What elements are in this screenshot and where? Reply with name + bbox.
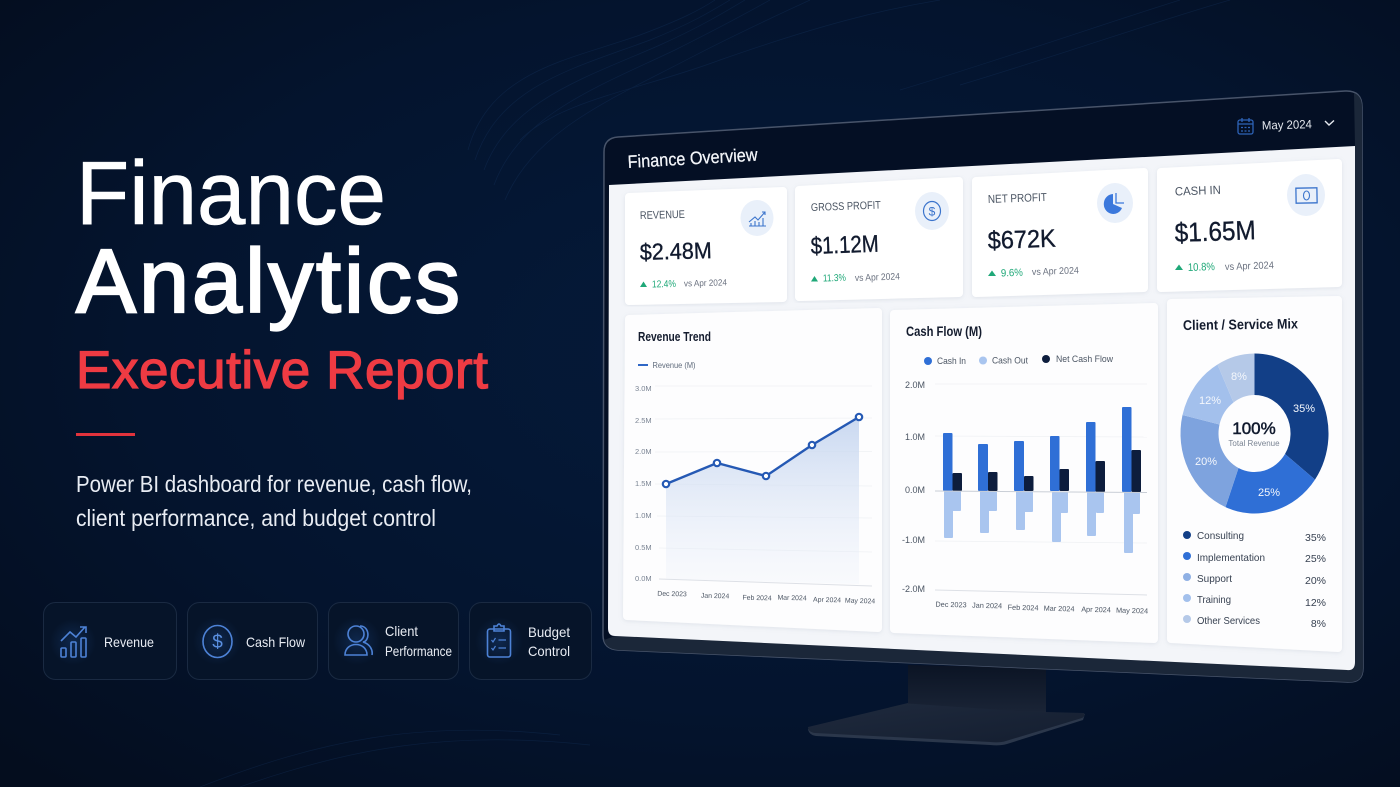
panel: client service mix xyxy=(1171,300,1338,648)
legend: revenue: Revenue (M) xyxy=(652,361,696,370)
bar chart: cash flow: -2.0M xyxy=(902,584,925,594)
donut chart: 20% xyxy=(1195,456,1217,468)
kpi card: cash in: 10.8% xyxy=(1188,261,1215,274)
line chart: revenue: Feb 2024 xyxy=(742,595,772,602)
legend: service mix: 8% xyxy=(1311,618,1326,630)
kpi card: revenue xyxy=(629,191,783,301)
bar chart: cash flow: 2.0M xyxy=(905,380,925,390)
line chart: revenue: 2.0M xyxy=(635,447,652,456)
kpi card: gross profit: 11.3% xyxy=(823,273,846,284)
kpi card: net profit: 9.6% xyxy=(1001,267,1023,279)
line chart: revenue: Dec 2023 xyxy=(657,591,687,598)
kpi card: revenue: 12.4% xyxy=(652,279,676,290)
kpi card: gross profit: GROSS PROFIT xyxy=(811,200,881,214)
pill: client performance: Performance xyxy=(385,643,452,659)
panel: revenue trend xyxy=(627,312,878,628)
title xyxy=(76,144,488,400)
bar chart: cash flow: 1.0M xyxy=(905,432,925,442)
legend: service mix: 35% xyxy=(1305,532,1326,544)
kpi card: cash in: $1.65M xyxy=(1174,215,1256,248)
legend: service mix: Support xyxy=(1197,573,1232,585)
line chart: revenue: 1.5M xyxy=(635,479,652,488)
legend: cash flow: Net Cash Flow xyxy=(1056,354,1113,365)
title: Executive Report xyxy=(76,341,488,400)
monitor bezel xyxy=(603,91,1363,682)
date selector: May 2024 xyxy=(1262,117,1312,132)
bar chart: cash flow: -1.0M xyxy=(902,535,925,545)
donut chart xyxy=(1180,354,1329,514)
legend: cash flow: Cash Out xyxy=(992,356,1028,366)
line chart: revenue: Jan 2024 xyxy=(701,593,729,600)
pill: cash flow: $ xyxy=(212,632,223,653)
subtitle xyxy=(76,471,472,531)
panel: client service mix: Client / Service Mix xyxy=(1183,315,1298,333)
line chart: revenue: 0.0M xyxy=(635,574,652,583)
pill: revenue xyxy=(44,602,176,680)
bar chart: cash flow: Feb 2024 xyxy=(1008,603,1039,612)
donut chart: Total Revenue xyxy=(1228,439,1280,448)
date selector xyxy=(1238,117,1334,134)
donut chart: 100% xyxy=(1232,419,1276,438)
legend: service mix: Consulting xyxy=(1197,530,1244,542)
legend: service mix: 20% xyxy=(1305,575,1326,587)
monitor stand xyxy=(808,665,1085,745)
screen header: Finance Overview: Finance Overview xyxy=(627,144,759,172)
subtitle: client performance, and budget control xyxy=(76,505,436,531)
legend: service mix: Implementation xyxy=(1197,552,1265,564)
legend: cash flow: Cash In xyxy=(937,356,966,367)
kpi card: cash in: vs Apr 2024 xyxy=(1225,260,1274,273)
kpi card: net profit xyxy=(976,172,1144,293)
pill: budget control: Budget xyxy=(528,624,570,640)
legend: service mix: 12% xyxy=(1305,597,1326,609)
title: Finance xyxy=(76,144,386,244)
legend: service mix: Other Services xyxy=(1197,615,1260,627)
pill: cash flow xyxy=(188,602,318,680)
donut chart: 12% xyxy=(1199,395,1221,407)
pill: budget control: Control xyxy=(528,643,570,659)
kpi card: revenue: $2.48M xyxy=(639,237,712,265)
cash out bars xyxy=(944,491,1140,553)
pill: client performance: Client xyxy=(385,623,418,639)
bar chart: cash flow: Dec 2023 xyxy=(935,600,967,609)
donut chart: 25% xyxy=(1258,487,1280,499)
panel: revenue trend: Revenue Trend xyxy=(638,330,711,344)
line chart: revenue: Apr 2024 xyxy=(813,597,841,604)
kpi card: gross profit xyxy=(799,181,959,297)
pill: budget control xyxy=(470,602,592,680)
kpi card: net profit: vs Apr 2024 xyxy=(1032,265,1079,278)
bar chart: cash flow: 0.0M xyxy=(905,485,925,495)
pill: revenue: Revenue xyxy=(104,634,154,650)
kpi card: gross profit: $1.12M xyxy=(810,231,879,260)
line chart: revenue: 2.5M xyxy=(635,416,652,425)
line chart: revenue: 3.0M xyxy=(635,384,652,393)
title: Analytics xyxy=(76,232,460,332)
subtitle: Power BI dashboard for revenue, cash flow, xyxy=(76,471,472,497)
bar chart: cash flow: Jan 2024 xyxy=(972,601,1002,610)
donut chart: 8% xyxy=(1231,371,1247,383)
net cash flow bars xyxy=(952,450,1141,492)
bezel side and bottom shading xyxy=(604,93,1363,682)
kpi card: cash in: CASH IN xyxy=(1175,183,1221,198)
line chart: revenue: 0.5M xyxy=(635,543,652,552)
kpi card: gross profit: $ xyxy=(929,204,936,218)
kpi card: net profit: NET PROFIT xyxy=(988,192,1047,206)
legend: service mix: Training xyxy=(1197,594,1231,606)
panel: cash flow xyxy=(894,307,1154,639)
kpi card: revenue: vs Apr 2024 xyxy=(684,277,727,288)
line chart: revenue: May 2024 xyxy=(845,598,875,605)
bar chart: cash flow xyxy=(902,380,1148,615)
legend: service mix xyxy=(1183,530,1326,630)
bar chart: cash flow: Mar 2024 xyxy=(1044,604,1075,613)
kpi card: gross profit: vs Apr 2024 xyxy=(855,271,900,284)
line chart: revenue: Mar 2024 xyxy=(777,595,807,602)
kpi card: revenue: REVENUE xyxy=(640,209,685,222)
dashboard screen xyxy=(608,117,1355,670)
accent divider xyxy=(76,433,135,436)
pill: cash flow: Cash Flow xyxy=(246,634,306,650)
donut chart: 35% xyxy=(1293,403,1315,415)
kpi card: cash in xyxy=(1161,163,1338,288)
kpi card: net profit: $672K xyxy=(987,225,1056,255)
line chart: revenue: 1.0M xyxy=(635,511,652,520)
bar chart: cash flow: Apr 2024 xyxy=(1081,605,1111,614)
legend: cash flow xyxy=(924,354,1113,367)
feature pills xyxy=(44,602,592,680)
legend: service mix: 25% xyxy=(1305,553,1326,565)
panel: cash flow: Cash Flow (M) xyxy=(906,323,982,339)
decorative wave lines xyxy=(200,0,1230,787)
cash in bars xyxy=(943,407,1132,492)
bar chart: cash flow: May 2024 xyxy=(1116,606,1148,615)
line chart: revenue xyxy=(635,384,875,605)
pill: client performance xyxy=(328,602,458,680)
